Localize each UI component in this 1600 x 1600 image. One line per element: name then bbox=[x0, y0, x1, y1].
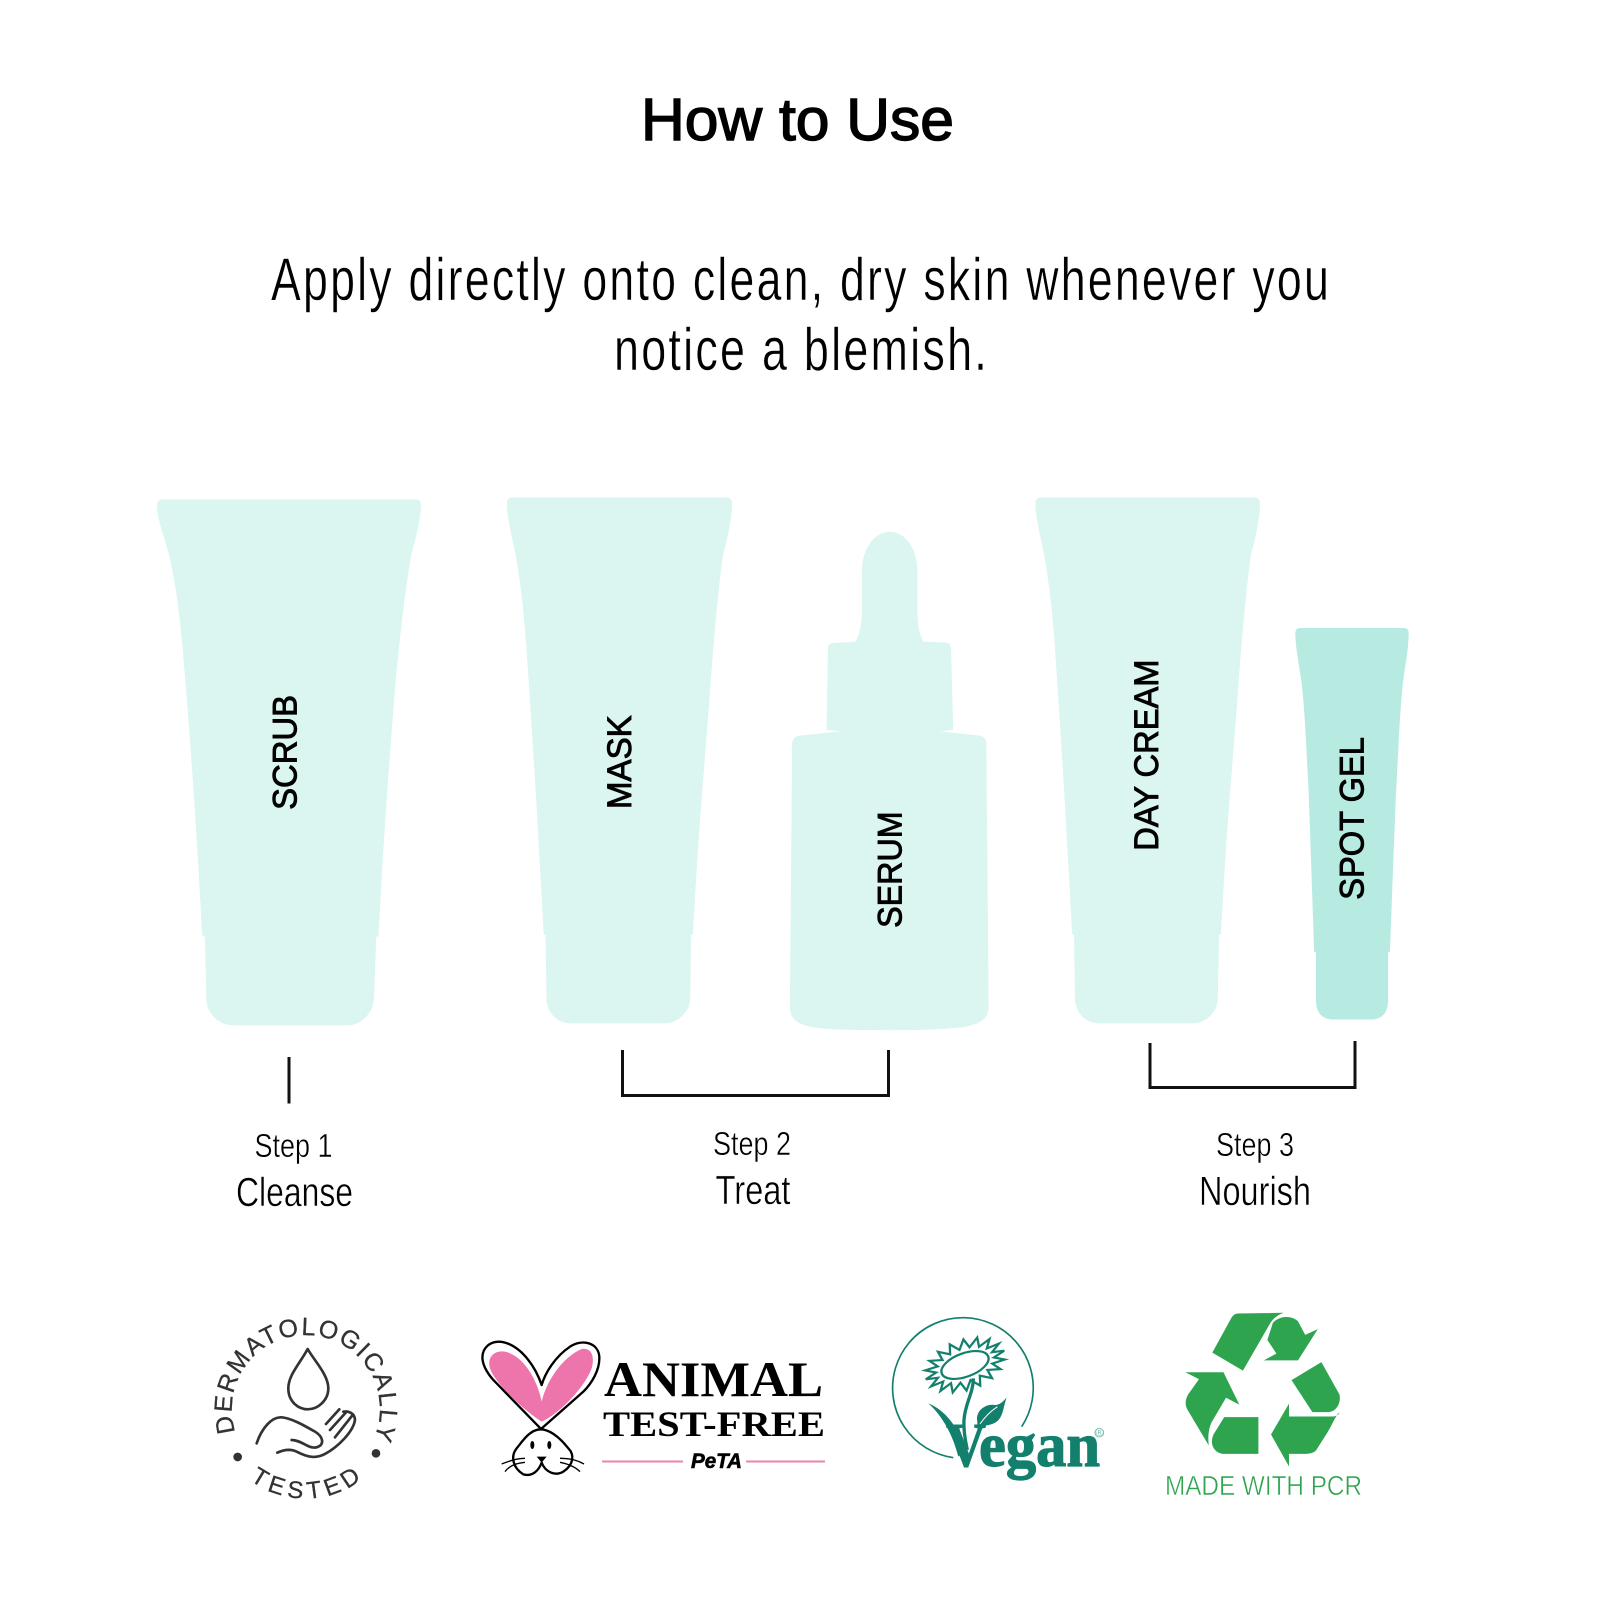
step 1 marker line bbox=[288, 1057, 290, 1104]
instruction text: notice a blemish. bbox=[614, 316, 989, 383]
step 3 label: Step 3 bbox=[1216, 1126, 1294, 1163]
step 3 bracket bbox=[1150, 1041, 1355, 1088]
badge: peta animal test-free: TEST-FREE bbox=[603, 1404, 825, 1444]
icon: hand bbox=[257, 1409, 355, 1457]
step 3 label: Nourish bbox=[1199, 1168, 1311, 1214]
badge: vegan: egan bbox=[979, 1412, 1100, 1480]
badge: peta animal test-free bbox=[482, 1342, 825, 1475]
product: scrub tube bbox=[157, 499, 421, 1025]
step 3 label bbox=[1199, 1126, 1311, 1214]
badge: made with pcr bbox=[1165, 1313, 1362, 1501]
product: spot gel tube bbox=[1295, 628, 1409, 1020]
badge: vegan: ® bbox=[1096, 1427, 1104, 1439]
product: scrub tube: SCRUB bbox=[265, 695, 304, 810]
step 2 label: Step 2 bbox=[713, 1125, 791, 1162]
instruction text bbox=[271, 246, 1331, 383]
product: mask tube: MASK bbox=[600, 715, 639, 809]
badge: vegan: V bbox=[946, 1412, 986, 1480]
badge: dermatologically tested: TESTED bbox=[254, 1466, 358, 1498]
step 1 label: Cleanse bbox=[236, 1169, 353, 1215]
title: How to Use bbox=[641, 87, 954, 153]
vegan circle bbox=[893, 1318, 1033, 1458]
icon: recycle arrows bbox=[1185, 1313, 1340, 1466]
made with pcr text: MADE WITH PCR bbox=[1165, 1470, 1362, 1501]
step 2 label: Treat bbox=[716, 1167, 791, 1213]
step 1 label bbox=[236, 1127, 353, 1215]
badge: dermatologically tested: DERMATOLOGICALLY bbox=[214, 1318, 398, 1444]
product: day cream tube: DAY CREAM bbox=[1127, 660, 1166, 851]
product: mask tube bbox=[507, 497, 732, 1023]
badge: vegan bbox=[893, 1318, 1104, 1480]
product: serum dropper bottle bbox=[790, 532, 989, 1030]
step 2 bracket bbox=[622, 1050, 888, 1096]
product: day cream tube bbox=[1035, 497, 1260, 1023]
step 1 label: Step 1 bbox=[254, 1127, 332, 1164]
product: serum dropper bottle: SERUM bbox=[870, 811, 909, 928]
products row bbox=[157, 497, 1409, 1030]
icon: stem and leaves bbox=[928, 1378, 1007, 1457]
badge: peta animal test-free: PeTA bbox=[691, 1450, 742, 1473]
badge: dermatologically tested bbox=[214, 1318, 398, 1498]
badge: peta animal test-free: ANIMAL bbox=[604, 1351, 823, 1407]
icon: rabbit head bbox=[502, 1429, 584, 1475]
icon: water drop bbox=[288, 1349, 328, 1409]
icon: rabbit ears bbox=[482, 1342, 599, 1429]
icon: sunflower bbox=[917, 1328, 1013, 1402]
step 2 label bbox=[713, 1125, 791, 1213]
product: spot gel tube: SPOT GEL bbox=[1332, 737, 1371, 900]
